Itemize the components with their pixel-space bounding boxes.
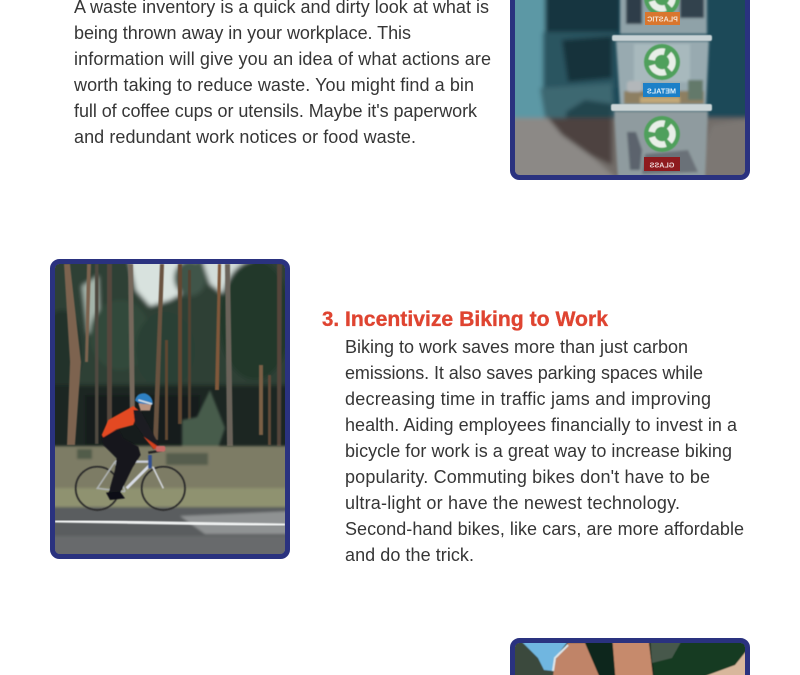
text block: biking to work: emissions. It also saves parking spaces while <box>345 363 703 383</box>
grass <box>55 444 285 490</box>
top bin <box>620 0 707 34</box>
text block: biking to work: ultra-light or have the newest technology. <box>345 493 680 513</box>
photo: stacked recycling bins <box>505 0 755 183</box>
trunks <box>64 264 282 446</box>
text block: biking to work: bicycle for work is a great way to increase biking <box>345 441 732 461</box>
icon: cyclist <box>76 393 185 510</box>
text block: biking to work: and do the trick. <box>345 545 474 565</box>
text block: biking to work: decreasing time in traffic jams and improving <box>345 389 711 409</box>
labels: mirrored bin tags: GLASS <box>649 161 674 170</box>
middle bin <box>616 41 709 105</box>
labels: mirrored bin tags <box>643 12 680 171</box>
text block: waste inventory: and redundant work notices or food waste. <box>74 127 416 147</box>
text block: waste inventory <box>73 0 491 147</box>
heading: step 3: 3. <box>322 307 339 331</box>
sky <box>128 254 200 306</box>
bottom bin <box>614 111 708 180</box>
text block: biking to work: health. Aiding employees financially to invest in a <box>345 415 738 435</box>
lower forest <box>55 384 285 446</box>
text block: biking to work <box>345 337 744 565</box>
decorative bin lids <box>611 35 712 111</box>
text block: biking to work: popularity. Commuting bikes don't have to be <box>345 467 710 487</box>
foliage <box>89 303 143 367</box>
text block: waste inventory: information will give you an idea of what actions are <box>74 49 491 69</box>
heading: step 3: Incentivize Biking to Work <box>345 307 608 331</box>
labels: mirrored bin tags: METALS <box>647 87 676 96</box>
text block: biking to work: Second-hand bikes, like cars, are more affordable <box>345 519 744 539</box>
text block: waste inventory: full of coffee cups or utensils. Maybe it's paperwork <box>74 101 478 121</box>
text block: biking to work: Biking to work saves more than just carbon <box>345 337 688 357</box>
photo: hands over grass <box>510 638 750 675</box>
text block: waste inventory: being thrown away in your workplace. This <box>74 23 411 43</box>
photo: cyclist on forest road <box>42 254 295 562</box>
icon: recycling circles <box>644 0 680 152</box>
labels: mirrored bin tags: PLASTIC <box>647 15 678 24</box>
text block: waste inventory: worth taking to reduce waste. You might find a bin <box>73 75 474 95</box>
